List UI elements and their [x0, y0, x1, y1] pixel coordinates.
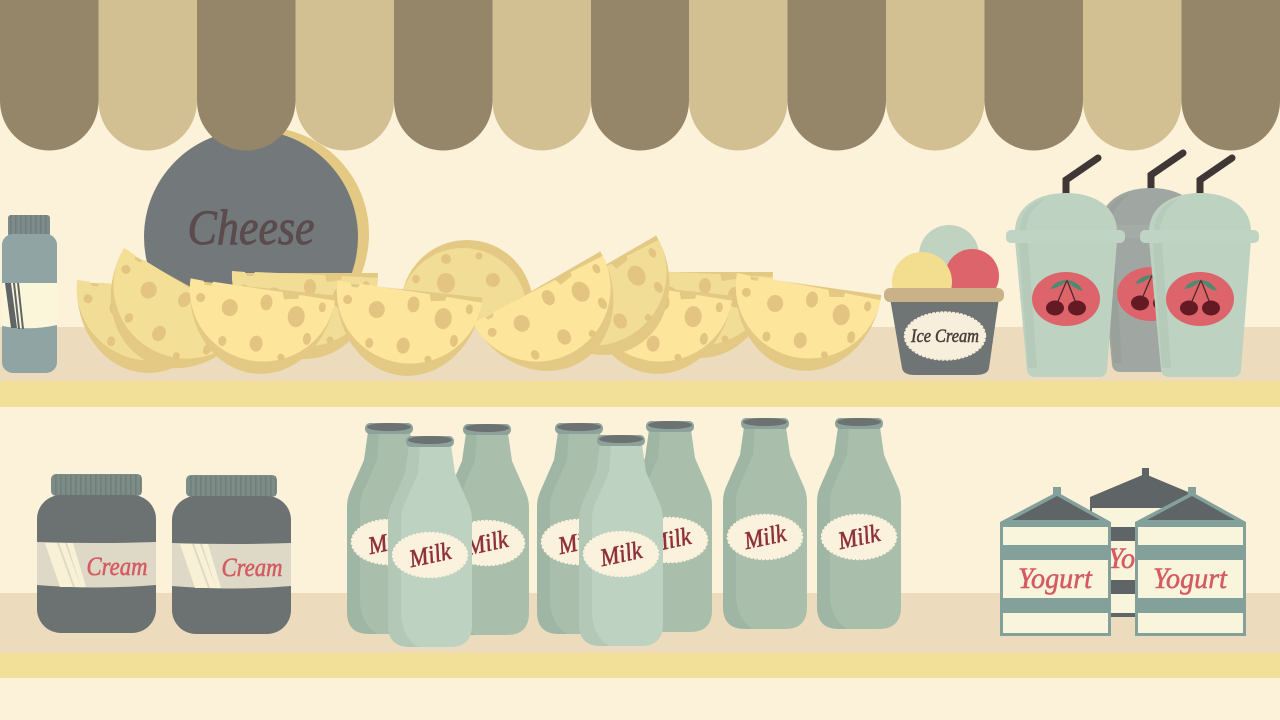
bottom shelf: [0, 593, 1280, 678]
top shelf: [0, 327, 1280, 407]
cheese label: Cheese: [188, 199, 314, 255]
yogurt label: Yogurt: [1018, 562, 1093, 595]
milk bottle front 1: [388, 436, 472, 647]
milk bottle back B: Milk: [463, 526, 511, 561]
yogurt label: Yogurt: [1153, 562, 1228, 595]
cream jar 2: [172, 475, 291, 634]
yogurt carton back: Yogurt: [1108, 542, 1183, 575]
striped awning: [0, 0, 1280, 150]
cheese wedges: [76, 236, 882, 376]
milk bottle back C: [537, 423, 621, 634]
milk bottle back B: [445, 424, 529, 635]
milk bottle back G: [817, 418, 901, 629]
milk bottle back F: [723, 418, 807, 629]
milk bottle back E: [628, 421, 712, 632]
milk bottle back A: Milk: [365, 525, 413, 560]
yogurt carton left: [1000, 487, 1111, 636]
cream jar 1: [37, 474, 156, 633]
milk bottle front 2: [579, 435, 663, 646]
milk bottle back G: Milk: [835, 520, 883, 555]
yogurt carton right: [1135, 487, 1246, 636]
milk bottle back C: Milk: [555, 525, 603, 560]
milk bottle back F: Milk: [741, 520, 789, 555]
yogurt carton back: [1090, 468, 1188, 617]
milk bottle front 2: Milk: [597, 537, 645, 572]
milk bottle front 1: Milk: [406, 538, 454, 573]
ice cream tub: [884, 225, 1004, 375]
cream label: Cream: [222, 553, 282, 582]
milkshake cups: [1006, 153, 1259, 377]
cream label: Cream: [86, 552, 148, 581]
milk bottle back E: Milk: [646, 523, 694, 558]
ice cream label: Ice Cream: [910, 326, 979, 347]
cheese wheel with sign: [144, 127, 369, 344]
milk bottle back A: [347, 423, 431, 634]
small bottle: [2, 215, 57, 373]
